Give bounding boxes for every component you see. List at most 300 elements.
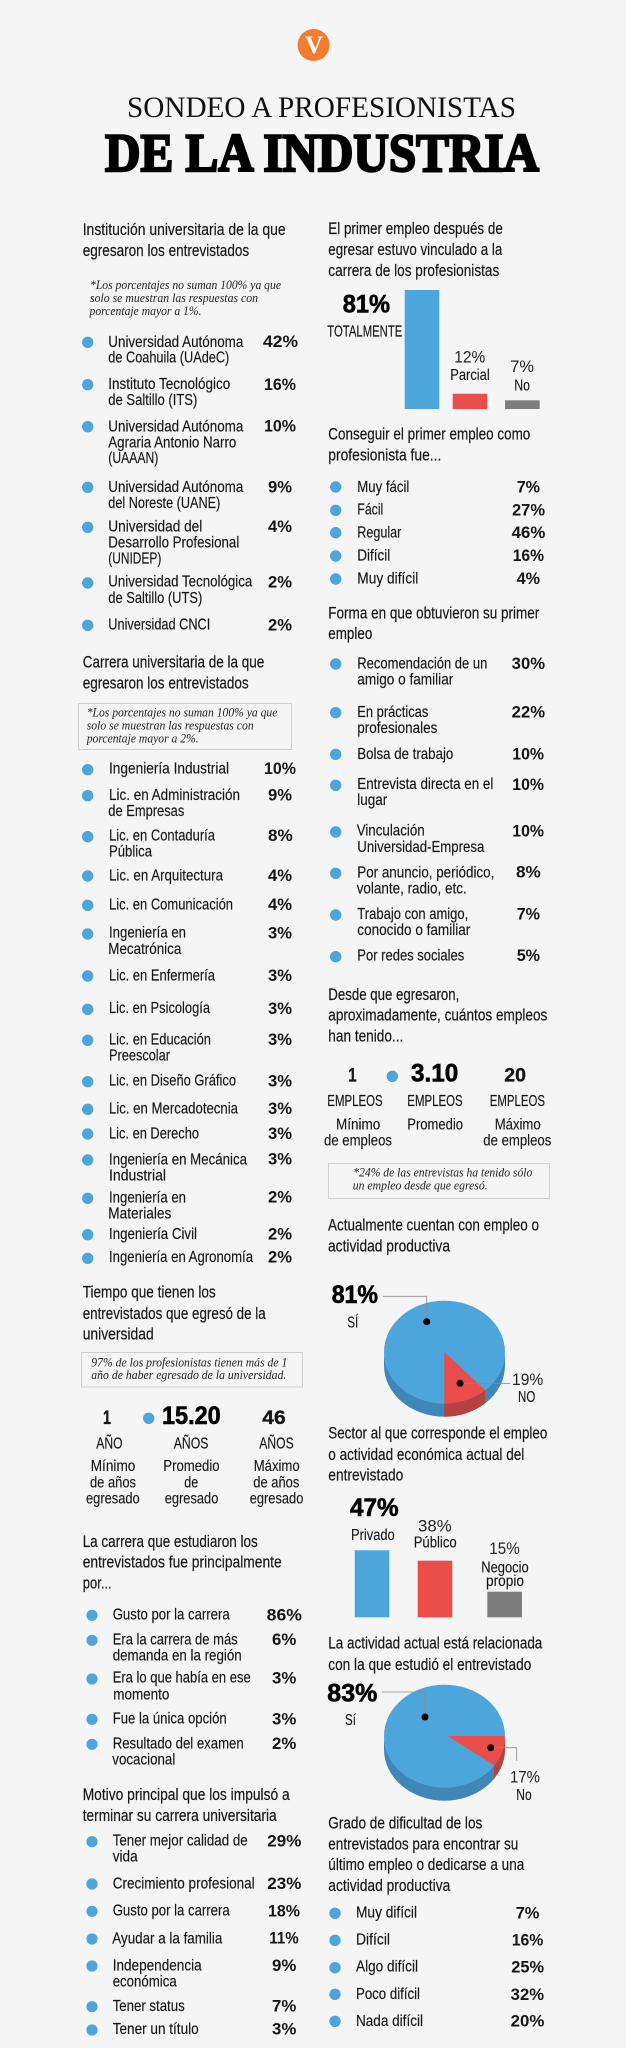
title: DE LA INDUSTRIA	[105, 123, 539, 183]
item: ayudar a la familia: 11%	[269, 1930, 299, 1948]
item: tener status: 7%	[272, 1998, 297, 2016]
item: más demanda: demanda en la región	[113, 1647, 242, 1664]
item: muy fácil: Muy fácil	[357, 479, 409, 496]
item: prácticas: profesionales	[357, 720, 437, 737]
pie chart: relacionada 83/17: 83%	[327, 1679, 377, 1707]
item: UANE: 9%	[268, 479, 292, 497]
item: Contaduría: Pública	[109, 844, 152, 861]
item: UAdeC: de Coahuila (UAdeC)	[108, 350, 229, 367]
bar chart: sector	[350, 1494, 529, 1617]
item: UAAAN: Universidad Autónoma	[108, 418, 243, 435]
heading: grado de dificultad: entrevistados para encontrar su	[328, 1835, 518, 1853]
item: algo difícil: Algo difícil	[356, 1959, 418, 1976]
item: recomendación: amigo o familiar	[357, 672, 454, 689]
item: entrevista directa	[330, 776, 544, 809]
heading: actualmente: actividad productiva	[328, 1237, 451, 1255]
item: algo difícil: 25%	[511, 1958, 544, 1976]
item: UANE	[82, 479, 292, 512]
item: Educación Preescolar: Lic. en Educación	[109, 1031, 211, 1048]
item: gusto por la carrera: 86%	[267, 1606, 302, 1624]
item: Contaduría: 8%	[268, 827, 293, 845]
panel: forma de obtener empleo	[328, 604, 545, 965]
item: Mecánica Industrial	[82, 1151, 292, 1184]
stat: promedio 3.10	[387, 1060, 463, 1133]
item: Derecho: Lic. en Derecho	[109, 1125, 199, 1142]
stat: máximo de empleos: 20	[504, 1066, 526, 1087]
item: prácticas	[330, 703, 545, 737]
item: Diseño Gráfico: Lic. en Diseño Gráfico	[109, 1073, 236, 1090]
stat: máximo de años: de años	[253, 1474, 299, 1491]
heading: carrera: egresaron los entrevistados	[83, 674, 249, 692]
item: UTS: de Saltillo (UTS)	[108, 590, 202, 607]
item: difícil: Difícil	[357, 547, 390, 564]
pie chart: empleo actual 81/19: NO	[518, 1389, 535, 1406]
item: por anuncio: Por anuncio, periódico,	[357, 864, 494, 881]
bar chart: sector: 15%	[489, 1539, 520, 1558]
heading: forma: Forma en que obtuvieron su primer	[328, 604, 540, 622]
note box: 24%	[328, 1164, 550, 1198]
item: gusto por la carrera	[86, 1902, 300, 1920]
item: Derecho: 3%	[268, 1125, 292, 1143]
item: Mecatrónica: 3%	[268, 925, 292, 943]
item: poco difícil: Poco difícil	[356, 1986, 420, 2003]
heading: conseguir: profesionista fue...	[328, 447, 441, 465]
pie chart: relacionada 83/17: Sí	[345, 1712, 357, 1729]
note box: porcentajes 2%: *Los porcentajes no suman 100% ya que	[87, 705, 278, 719]
item: redes sociales	[330, 947, 540, 965]
heading: grado de dificultad: último empleo o dedicarse a una	[328, 1856, 525, 1874]
pie chart: empleo actual 81/19	[332, 1281, 543, 1417]
stat: mínimo de empleos	[324, 1066, 392, 1149]
item: independencia económica: 9%	[272, 1957, 297, 1975]
item: Ingeniería Industrial	[82, 760, 296, 778]
stat: máximo de años: 46	[262, 1408, 286, 1429]
stat: mínimo de empleos: EMPLEOS	[327, 1093, 383, 1110]
item: muy difícil	[329, 1904, 540, 1922]
heading: institución: Institución universitaria de la que	[83, 221, 286, 239]
item: CNCI: Universidad CNCI	[108, 616, 210, 633]
stat: mínimo de empleos: de empleos	[324, 1132, 392, 1149]
stat: mínimo de años: 1	[103, 1408, 111, 1429]
bar chart: vinculación: Parcial	[450, 367, 490, 384]
item: gusto por la carrera: Gusto por la carrera	[113, 1903, 230, 1920]
bar chart: vinculación: 12%	[454, 348, 485, 367]
item: UAdeC: Universidad Autónoma	[108, 334, 243, 351]
title: SONDEO A PROFESIONISTAS	[127, 91, 516, 124]
stat: promedio 15.20: de	[184, 1474, 198, 1491]
item: tener un título: 3%	[272, 2021, 297, 2039]
stat: promedio 15.20	[143, 1402, 221, 1507]
item: por anuncio: volante, radio, etc.	[357, 880, 467, 897]
item: Mecatrónica	[82, 925, 292, 958]
item: Administración: de Empresas	[108, 803, 184, 820]
item: muy fácil	[330, 479, 540, 497]
item: trabajo con amigo	[330, 905, 540, 939]
pie chart: empleo actual 81/19: SÍ	[347, 1314, 359, 1331]
item: muy difícil	[330, 570, 540, 588]
item: crecimiento profesional: Crecimiento profesional	[113, 1875, 255, 1892]
item: Educación Preescolar: Preescolar	[109, 1047, 171, 1064]
stat: mínimo de empleos: 1	[348, 1066, 357, 1087]
item: difícil	[330, 547, 544, 565]
heading: la carrera: por...	[83, 1575, 112, 1593]
item: Derecho	[82, 1125, 292, 1143]
title	[105, 91, 539, 183]
item: fácil: 27%	[512, 501, 545, 519]
item: examen vocacional: vocacional	[112, 1751, 175, 1768]
bar chart: vinculación	[327, 290, 540, 409]
pie chart: relacionada 83/17	[327, 1679, 540, 1804]
item: Comunicación: 4%	[268, 896, 292, 914]
bar chart: sector: 47%	[350, 1494, 399, 1522]
item: independencia económica: Independencia	[113, 1958, 202, 1975]
item: Mercadotecnia: Lic. en Mercadotecnia	[109, 1101, 238, 1118]
item: Ingeniería Industrial: Ingeniería Industrial	[109, 761, 229, 778]
icon: orange V logo	[298, 29, 330, 61]
item: Mecánica Industrial: Ingeniería en Mecánica	[109, 1151, 247, 1168]
item: Diseño Gráfico: 3%	[268, 1072, 292, 1090]
note box: porcentajes 2%: solo se muestran las respuestas con	[87, 719, 254, 733]
item: gusto por la carrera: Gusto por la carrera	[113, 1607, 230, 1624]
heading: actualmente	[328, 1217, 539, 1255]
panel: empleo actual	[328, 1217, 543, 1417]
item: calidad de vida: 29%	[267, 1833, 302, 1851]
note box: 24%: *24% de las entrevistas ha tenido sólo	[353, 1166, 532, 1180]
item: Psicología: Lic. en Psicología	[109, 1000, 210, 1017]
item: Civil: 2%	[268, 1225, 292, 1243]
stat: máximo de empleos: Máximo	[495, 1116, 541, 1133]
item: Mecatrónica: Mecatrónica	[108, 941, 181, 958]
item: UAdeC	[82, 333, 298, 367]
heading: carrera: Carrera universitaria de la que	[83, 654, 264, 672]
stat: mínimo de años: Mínimo	[91, 1458, 135, 1475]
item: UAAAN: (UAAAN)	[108, 450, 158, 467]
heading: forma	[328, 604, 540, 643]
heading: la carrera	[83, 1533, 282, 1593]
item: UANE: del Noreste (UANE)	[108, 495, 220, 512]
item: única opción: 3%	[272, 1710, 297, 1728]
item: lo que había: momento	[113, 1686, 169, 1703]
item: CNCI	[82, 616, 292, 634]
pie chart: empleo actual 81/19: 19%	[512, 1370, 543, 1389]
item: Civil	[82, 1225, 292, 1243]
item: entrevista directa: Entrevista directa en el	[357, 776, 493, 793]
heading: institución	[83, 221, 286, 260]
icon: orange V logo: V	[305, 32, 323, 59]
item: UNIDEP: 4%	[268, 518, 292, 536]
item: examen vocacional: Resultado del examen	[113, 1735, 244, 1752]
pie chart: relacionada 83/17: 17%	[510, 1768, 540, 1787]
item: UNIDEP: (UNIDEP)	[108, 550, 161, 567]
item: entrevista directa: lugar	[357, 792, 388, 809]
note box: porcentajes 2%	[78, 704, 292, 750]
item: regular: 46%	[512, 524, 546, 542]
stat: máximo de empleos: EMPLEOS	[490, 1093, 545, 1110]
panel: conseguir primer empleo	[328, 425, 546, 588]
heading: tiempo: Tiempo que tienen los	[83, 1284, 216, 1302]
item: redes sociales: Por redes sociales	[357, 948, 464, 965]
heading: desde que egresaron: aproximadamente, cuántos empleos	[328, 1007, 547, 1025]
item: Arquitectura: 4%	[268, 867, 292, 885]
heading: la carrera: La carrera que estudiaron los	[83, 1533, 258, 1551]
item: calidad de vida: vida	[113, 1849, 138, 1866]
note: porcentajes 1%	[89, 278, 281, 318]
item: tener un título: Tener un título	[113, 2021, 199, 2038]
item: UNIDEP	[82, 518, 292, 567]
stat: promedio 3.10: EMPLEOS	[407, 1093, 463, 1110]
item: bolsa de trabajo	[330, 746, 544, 764]
item: Contaduría: Lic. en Contaduría	[109, 828, 215, 845]
stat: promedio 3.10: Promedio	[407, 1116, 463, 1133]
item: Contaduría	[82, 827, 293, 861]
item: más demanda: Era la carrera de más	[113, 1631, 238, 1648]
stat: promedio 3.10: 3.10	[411, 1060, 458, 1088]
heading: grado de dificultad: actividad productiva	[328, 1877, 451, 1895]
item: Mercadotecnia: 3%	[268, 1100, 292, 1118]
item: Psicología: 3%	[268, 1000, 292, 1018]
panel: grado de dificultad	[328, 1814, 545, 2031]
heading: actividad relacionada: con la que estudió el entrevistado	[328, 1656, 531, 1674]
item: regular	[330, 524, 546, 542]
item: poco difícil	[329, 1986, 544, 2004]
item: poco difícil: 32%	[511, 1986, 544, 2004]
item: única opción: Fue la única opción	[113, 1710, 227, 1727]
bar chart: sector: 38%	[418, 1516, 452, 1535]
item: Ingeniería Industrial: 10%	[264, 760, 296, 778]
item: UAAAN: 10%	[264, 418, 296, 436]
item: Materiales: Ingeniería en	[109, 1189, 186, 1206]
item: difícil: 16%	[512, 1932, 544, 1950]
pie chart: relacionada 83/17: No	[516, 1787, 532, 1804]
heading: motivo principal: terminar su carrera universitaria	[83, 1807, 277, 1825]
bar chart: vinculación: 7%	[510, 357, 534, 376]
heading: actividad relacionada	[328, 1634, 543, 1674]
bar chart: sector: Público	[414, 1534, 457, 1551]
note box: 24%: un empleo desde que egresó.	[353, 1178, 488, 1192]
item: fácil	[330, 501, 545, 519]
item: calidad de vida	[86, 1833, 302, 1866]
item: recomendación: Recomendación de un	[357, 655, 487, 672]
item: por anuncio: 8%	[516, 864, 541, 882]
heading: conseguir: Conseguir el primer empleo como	[328, 425, 530, 443]
heading: grado de dificultad	[328, 1814, 525, 1895]
item: entrevista directa: 10%	[512, 776, 544, 794]
heading: primer empleo: carrera de los profesionistas	[328, 262, 499, 280]
item: UTS	[82, 574, 292, 607]
item: Agronomía: 2%	[268, 1249, 292, 1267]
item: Mecánica Industrial: Industrial	[109, 1167, 166, 1184]
stat: promedio 15.20: Promedio	[163, 1458, 220, 1475]
heading: la carrera: entrevistados fue principalmente	[83, 1554, 282, 1572]
heading: actividad relacionada: La actividad actual está relacionada	[328, 1634, 543, 1652]
panel: carrera universitaria	[78, 654, 296, 1267]
panel: motivo de la carrera	[83, 1533, 302, 1768]
item: fácil: Fácil	[357, 502, 383, 519]
item: lo que había: 3%	[272, 1670, 297, 1688]
item: UNIDEP: Desarrollo Profesional	[108, 534, 239, 551]
note box: 97%: 97% de los profesionistas tienen más de 1	[91, 1356, 287, 1370]
item: prácticas: 22%	[512, 703, 545, 721]
item: Arquitectura: Lic. en Arquitectura	[109, 868, 223, 885]
stat: máximo de años: egresado	[250, 1490, 303, 1507]
item: difícil: 16%	[513, 547, 544, 565]
note box: 97%: año de haber egresado de la universidad.	[91, 1368, 286, 1382]
stat: máximo de empleos	[483, 1066, 552, 1149]
item: Materiales	[82, 1189, 292, 1222]
item: Educación Preescolar: 3%	[268, 1031, 292, 1049]
item: Enfermería: 3%	[268, 967, 292, 985]
heading: sector	[328, 1424, 547, 1485]
item: muy difícil: 4%	[517, 570, 540, 588]
item: recomendación: 30%	[512, 655, 545, 673]
pie chart: empleo actual 81/19: 81%	[332, 1281, 378, 1309]
item: difícil	[329, 1931, 544, 1950]
item: ayudar a la familia: Ayudar a la familia	[112, 1930, 222, 1947]
item: CNCI: 2%	[268, 616, 292, 634]
stat: promedio 15.20: AÑOS	[174, 1435, 208, 1452]
item: regular: Regular	[357, 525, 402, 542]
heading: actualmente: Actualmente cuentan con empleo o	[328, 1217, 539, 1235]
item: ITS: Instituto Tecnológico	[108, 376, 230, 393]
item: Civil: Ingeniería Civil	[109, 1226, 197, 1243]
item: muy difícil: 7%	[516, 1904, 540, 1922]
bar chart: vinculación: TOTALMENTE	[327, 324, 402, 341]
item: más demanda: 6%	[272, 1631, 297, 1649]
item: Comunicación: Lic. en Comunicación	[109, 897, 233, 914]
item: independencia económica: económica	[113, 1974, 177, 1991]
stat: mínimo de años: de años	[90, 1474, 136, 1491]
heading: tiempo: universidad	[83, 1326, 154, 1344]
item: Mecatrónica: Ingeniería en	[109, 925, 186, 942]
item: UANE: Universidad Autónoma	[108, 479, 243, 496]
heading: desde que egresaron: Desde que egresaron,	[328, 986, 459, 1004]
item: nada difícil: Nada difícil	[356, 2013, 423, 2030]
item: Arquitectura	[82, 867, 292, 885]
heading: primer empleo: El primer empleo después de	[328, 220, 503, 238]
item: Enfermería: Lic. en Enfermería	[109, 967, 215, 984]
stat: máximo de años	[250, 1408, 303, 1507]
heading: sector: o actividad económica actual del	[328, 1446, 524, 1464]
item: Administración	[82, 787, 292, 820]
item: crecimiento profesional: 23%	[267, 1875, 302, 1893]
item: prácticas: En prácticas	[357, 704, 428, 721]
item: Materiales: Materiales	[108, 1205, 171, 1222]
item: ITS: 16%	[264, 376, 296, 394]
note box: porcentajes 2%: porcentaje mayor a 2%.	[86, 732, 199, 746]
heading: motivo principal: Motivo principal que los impulsó a	[83, 1786, 290, 1804]
note: porcentajes 1%: *Los porcentajes no suman 100% ya que	[90, 278, 281, 292]
item: gusto por la carrera	[86, 1606, 302, 1624]
panel: actividad relacionada	[327, 1634, 543, 1804]
item: Administración: Lic. en Administración	[109, 787, 240, 804]
stat: promedio 15.20: 15.20	[162, 1402, 221, 1430]
heading: carrera	[83, 654, 264, 692]
stat: promedio 15.20: egresado	[165, 1490, 218, 1507]
item: Comunicación	[82, 896, 292, 914]
item: bolsa de trabajo: 10%	[512, 746, 544, 764]
item: examen vocacional	[86, 1735, 297, 1768]
item: tener un título	[86, 2021, 297, 2039]
item: calidad de vida: Tener mejor calidad de	[113, 1833, 248, 1850]
item: vinculación: 10%	[512, 822, 544, 840]
bar chart: sector: propio	[486, 1573, 524, 1590]
item: examen vocacional: 2%	[272, 1735, 297, 1753]
stat: mínimo de años: AÑO	[96, 1435, 123, 1452]
item: vinculación	[330, 822, 544, 856]
item: UAAAN	[82, 418, 296, 467]
item: más demanda	[86, 1631, 297, 1664]
item: muy difícil: Muy difícil	[356, 1904, 417, 1921]
item: Psicología	[82, 1000, 292, 1018]
item: gusto por la carrera: 18%	[268, 1902, 300, 1920]
bar chart: vinculación: No	[514, 378, 530, 395]
heading: desde que egresaron: han tenido...	[328, 1027, 403, 1045]
heading: primer empleo: egresar estuvo vinculado a la	[328, 241, 503, 259]
item: Mecánica Industrial: 3%	[268, 1151, 292, 1169]
item: muy fácil: 7%	[517, 479, 540, 497]
item: nada difícil	[329, 2013, 545, 2031]
heading: sector: Sector al que corresponde el empleo	[328, 1424, 547, 1442]
item: por anuncio	[330, 864, 541, 897]
item: trabajo con amigo: conocido o familiar	[357, 922, 471, 939]
heading: grado de dificultad: Grado de dificultad de los	[328, 1814, 482, 1832]
heading: motivo principal	[83, 1786, 290, 1825]
panel: institución universitaria	[82, 221, 298, 634]
heading: institución: egresaron los entrevistados	[83, 242, 249, 260]
heading: tiempo: entrevistados que egresó de la	[83, 1305, 266, 1323]
item: trabajo con amigo: Trabajo con amigo,	[357, 906, 468, 923]
item: tener status	[86, 1998, 297, 2016]
heading: tiempo	[83, 1284, 266, 1344]
panel: tiempo de egresados	[82, 1284, 303, 1507]
item: vinculación: Universidad-Empresa	[357, 839, 484, 856]
stat: mínimo de años: egresado	[86, 1490, 140, 1507]
heading: desde que egresaron	[328, 986, 547, 1045]
item: vinculación: Vinculación	[357, 823, 425, 840]
panel: sector	[328, 1424, 547, 1617]
panel: cuántos empleos	[324, 986, 552, 1198]
bar chart: sector: Negocio	[481, 1560, 529, 1577]
item: UAdeC: 42%	[263, 333, 298, 351]
item: tener status: Tener status	[113, 1998, 185, 2015]
item: redes sociales: 5%	[517, 947, 540, 965]
stat: máximo de años: AÑOS	[259, 1435, 294, 1452]
bar chart: sector: Privado	[351, 1527, 395, 1544]
heading: forma: empleo	[328, 625, 372, 643]
item: independencia económica	[86, 1957, 297, 1991]
panel: motivo para terminar	[83, 1786, 302, 2039]
panel: primer empleo vinculado	[327, 220, 540, 409]
item: Educación Preescolar	[82, 1031, 292, 1064]
heading: sector: entrevistado	[328, 1467, 403, 1485]
stat: máximo de empleos: de empleos	[483, 1132, 552, 1149]
item: lo que había	[86, 1670, 297, 1703]
item: UTS: Universidad Tecnológica	[108, 574, 252, 591]
stat: máximo de años: Máximo	[254, 1458, 300, 1475]
item: Materiales: 2%	[268, 1189, 292, 1207]
item: nada difícil: 20%	[511, 2013, 545, 2031]
item: Agronomía: Ingeniería en Agronomía	[109, 1249, 253, 1266]
item: algo difícil	[329, 1958, 544, 1976]
item: muy difícil: Muy difícil	[357, 570, 418, 587]
item: ayudar a la familia	[86, 1930, 299, 1948]
item: trabajo con amigo: 7%	[517, 905, 540, 923]
note box: 97%	[82, 1352, 302, 1387]
item: ITS: de Saltillo (ITS)	[108, 392, 197, 409]
heading: conseguir	[328, 425, 530, 465]
note: porcentajes 1%: porcentaje mayor a 1%.	[89, 304, 202, 318]
stat: mínimo de años	[86, 1408, 140, 1507]
